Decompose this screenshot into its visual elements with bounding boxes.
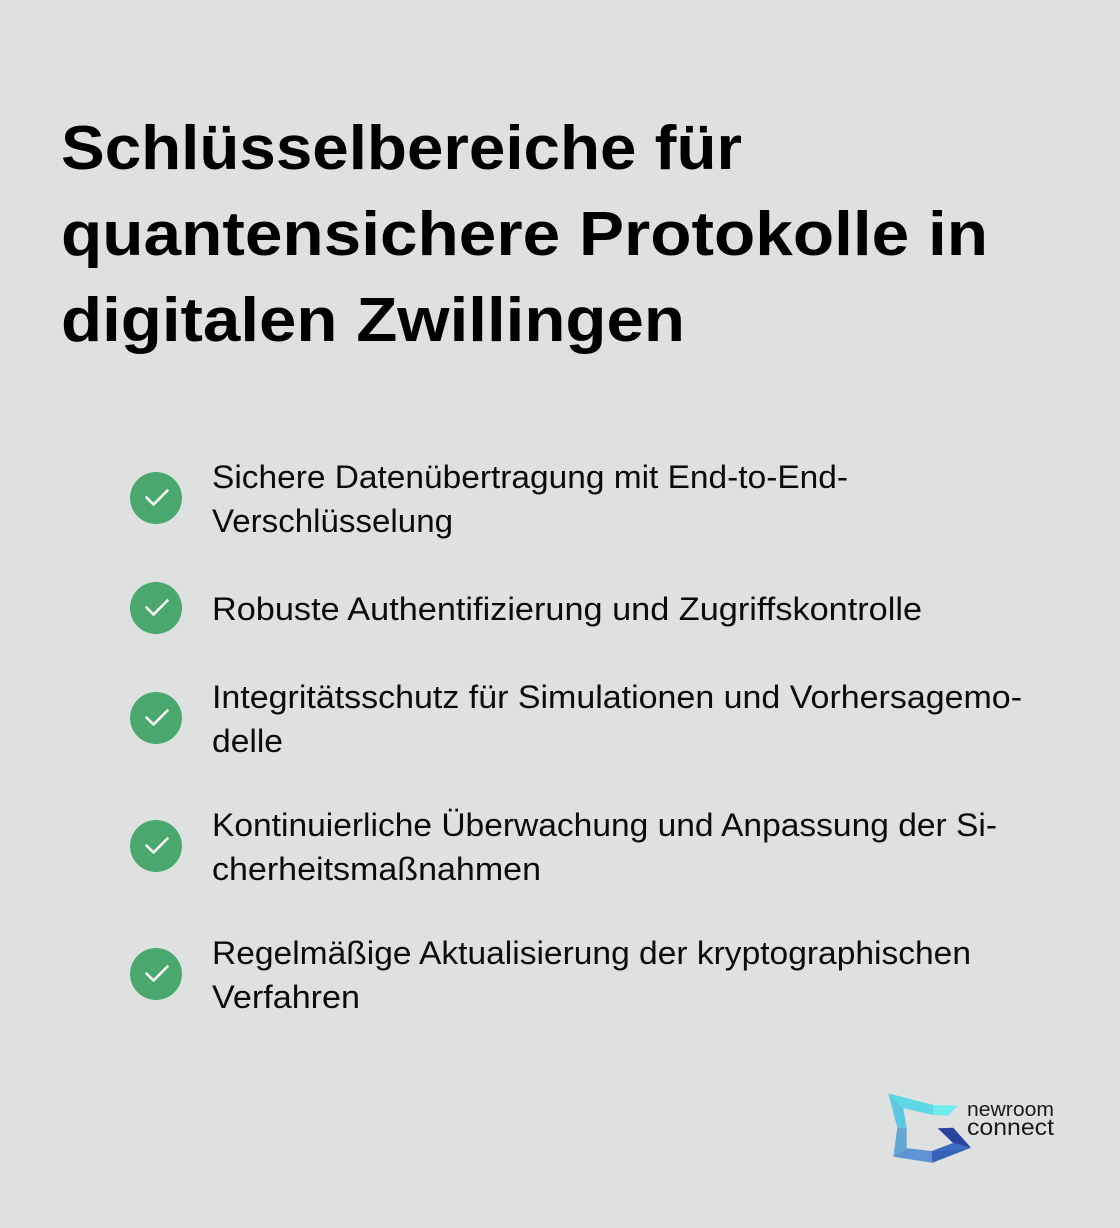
text: item 1: Sichere Datenübertragung mit End-to-End- <box>212 459 848 495</box>
title <box>61 114 988 355</box>
icon: check 3 <box>130 692 182 744</box>
icon: check 1 <box>130 472 182 524</box>
list item 5 <box>130 935 971 1015</box>
text: item 5: Verfahren <box>212 979 360 1015</box>
text: item 4: cherheitsmaßnahmen <box>212 851 541 887</box>
text: item 4: Kontinuierliche Überwachung und Anpassung der Si- <box>212 807 997 843</box>
icon: check 2 <box>130 582 182 634</box>
title: Schlüsselbereiche für <box>61 114 742 183</box>
logo mark <box>888 1093 971 1163</box>
logo wordmark <box>967 1099 1055 1140</box>
title: quantensichere Protokolle in <box>61 200 988 269</box>
list item 2 <box>130 582 922 634</box>
text: item 5: Regelmäßige Aktualisierung der kryptographischen <box>212 935 971 971</box>
text: item 1 <box>212 459 848 539</box>
icon: check 4 <box>130 820 182 872</box>
list item 1 <box>130 459 848 539</box>
logo: newroom connect <box>888 1093 1055 1163</box>
title: digitalen Zwillingen <box>61 286 685 355</box>
text: item 2: Robuste Authentifizierung und Zugriffskontrolle <box>212 591 922 627</box>
text: item 3: delle <box>212 723 283 759</box>
text: item 1: Verschlüsselung <box>212 503 453 539</box>
text: item 4 <box>212 807 997 887</box>
logo wordmark: newroom <box>967 1099 1054 1121</box>
logo wordmark: connect <box>967 1114 1055 1140</box>
text: item 3 <box>212 679 1022 759</box>
list item 4 <box>130 807 997 887</box>
list item 3 <box>130 679 1022 759</box>
icon: check 5 <box>130 948 182 1000</box>
text: item 5 <box>212 935 971 1015</box>
text: item 3: Integritätsschutz für Simulationen und Vorhersagemo- <box>212 679 1022 715</box>
